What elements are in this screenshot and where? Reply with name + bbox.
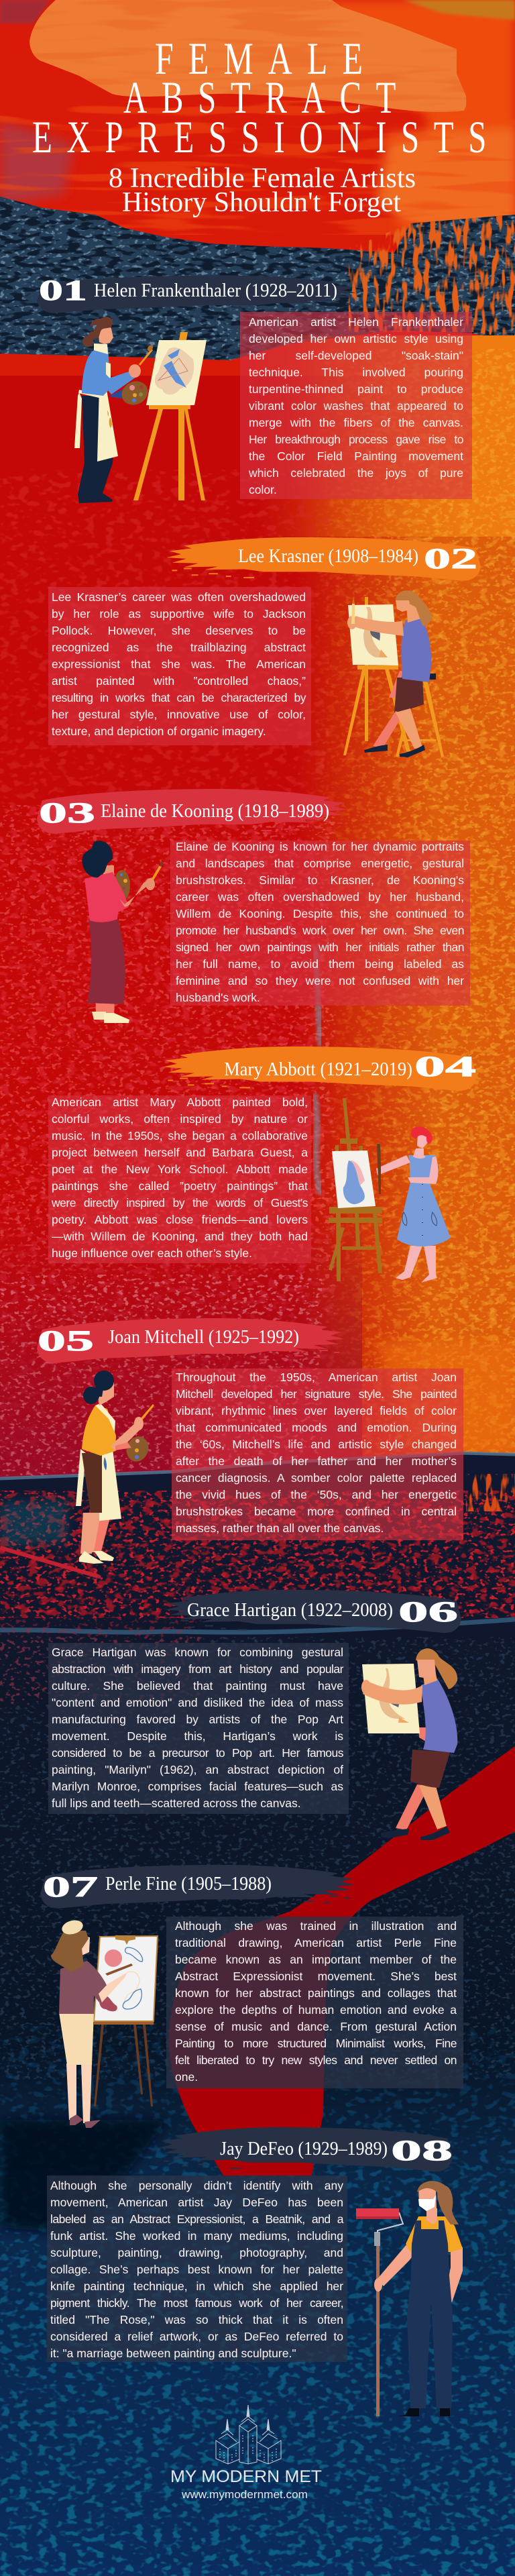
name: Joan Mitchell (1925–1992)	[108, 1326, 299, 1348]
body text: cancer diagnosis. A somber color palette replaced	[176, 1470, 457, 1484]
body text: turpentine-thinned paint to produce	[249, 382, 463, 396]
body text: recognized as the trailblazing abstract	[52, 640, 306, 653]
body text: explore the depths of human emotion and evoke a	[175, 2003, 457, 2017]
body text: that communicated moods and emotion. During	[176, 1421, 457, 1434]
text panel	[170, 841, 470, 1006]
body text: known for her abstract paintings and collages that	[175, 1986, 457, 1999]
body text: —with Willem de Kooning, and they both had	[52, 1229, 308, 1242]
body text: resulting in works that can be characterized by	[52, 691, 306, 704]
footer: My Modern Met logo	[168, 2404, 323, 2502]
heading: 06 Grace Hartigan	[165, 1590, 461, 1633]
illustration: painter with beret at tall easel	[50, 1920, 160, 2129]
body text	[249, 315, 463, 496]
body text	[52, 590, 306, 738]
website: www.mymodernmet.com	[181, 2488, 308, 2501]
number 07: 07	[43, 1872, 98, 1903]
icon: three skyscrapers logo	[215, 2404, 282, 2465]
body text: Pollock. However, she deserves to be	[52, 624, 306, 637]
body text: considered to be a precursor to Pop art. Her famous	[52, 1746, 343, 1759]
body text: Although she was trained in illustration and	[175, 1919, 457, 1932]
body text: Although she personally didn’t identify with any	[50, 2179, 343, 2192]
body text: Abstract Expressionist movement. She’s best	[175, 1970, 457, 1983]
body text: poetry. Abbott was close friends—and lovers	[52, 1213, 308, 1226]
name: Helen Frankenthaler (1928–2011)	[94, 280, 337, 301]
text panel	[48, 1095, 311, 1263]
number 08: 08	[391, 2135, 453, 2167]
body text	[52, 1095, 308, 1260]
body text: signed her own paintings with her initials rather than	[176, 941, 464, 954]
panel: 07 Perle Fine	[40, 1865, 463, 2128]
panel: 05 Joan Mitchell	[37, 1318, 463, 1564]
body text: it: "a marriage between painting and sculpture."	[50, 2347, 296, 2360]
body text: husband's work.	[176, 991, 260, 1004]
body text: poet at the New York School. Abbott made	[52, 1162, 308, 1175]
body text: American artist Helen Frankenthaler	[249, 315, 463, 329]
body text: painting, "Marilyn" (1962), an abstract depiction of	[52, 1763, 343, 1776]
body text: collage. She’s perhaps best known for her palette	[50, 2262, 343, 2275]
body text: were directly inspired by the words of Guest's	[52, 1195, 308, 1209]
text panel	[172, 1368, 463, 1540]
body text: her gestural style, innovative use of color,	[52, 707, 306, 720]
body text: vibrant, rhythmic lines over layered fields of color	[176, 1403, 457, 1417]
body text: labeled as an Abstract Expressionist, a Beatnik, and a	[50, 2212, 343, 2226]
body text: movement, American artist Jay DeFeo has been	[50, 2195, 343, 2208]
body text: masses, rather than all over the canvas.	[176, 1521, 384, 1535]
body text	[176, 1370, 457, 1535]
panel: 03 Elaine de Kooning	[37, 789, 470, 1023]
heading: 05 Joan Mitchell	[37, 1318, 345, 1363]
body text: artist painted with ”controlled chaos,”	[52, 674, 306, 687]
name: Lee Krasner (1908–1984)	[238, 545, 418, 567]
title: Abstract: ABSTRACT	[123, 72, 410, 123]
number 04: 04	[414, 1051, 476, 1083]
body text: sculpture, painting, drawing, photography, and	[50, 2246, 343, 2259]
panel: 08 Jay DeFeo	[0, 2123, 515, 2418]
body text: her self-developed "soak-stain"	[249, 349, 463, 362]
body text: her full name, to avoid them being labeled as	[176, 957, 464, 971]
body text: felt liberated to try new styles and never settled on	[175, 2053, 457, 2066]
panel: 06 Grace Hartigan	[48, 1590, 461, 1840]
subtitle line 2: History Shouldn't Forget	[122, 187, 401, 218]
body text: music. In the 1950s, she began a collaborative	[52, 1128, 308, 1142]
body text: funk artist. She worked in many mediums, including	[50, 2229, 343, 2242]
body text: texture, and depiction of organic imagery.	[52, 724, 266, 738]
text panel	[240, 312, 472, 499]
body text: paintings she called ”poetry paintings” that	[52, 1179, 308, 1193]
heading: 03 Elaine de Kooning	[37, 789, 347, 834]
body text: pigment thickly. The most famous work of her career,	[50, 2296, 343, 2309]
name: Grace Hartigan (1922–2008)	[187, 1599, 393, 1621]
body text: one.	[175, 2070, 198, 2084]
body text: American artist Mary Abbott painted bold,	[52, 1095, 308, 1108]
body text: knife painting technique, in which she applied her	[50, 2279, 343, 2293]
body text: manufacturing favored by artists of the Pop Art	[52, 1712, 343, 1725]
body text: Elaine de Kooning is known for her dynamic portraits	[176, 840, 464, 853]
illustration: painter in yellow with apron and palette	[76, 1371, 154, 1564]
body text: developed her own artistic style using	[249, 331, 463, 345]
name: Mary Abbott (1921–2019)	[224, 1059, 412, 1080]
body text: "content and emotion" and disliked the idea of mass	[52, 1696, 343, 1709]
title block	[32, 33, 501, 218]
brand name and website	[168, 2467, 323, 2502]
body text: considered a relief artwork, or as DeFeo referred to	[50, 2329, 343, 2343]
body text: the vivid hues of the ‘50s, and her energetic	[176, 1488, 457, 1501]
brand name: MY MODERN MET	[170, 2467, 322, 2486]
body text: after the death of her father and her mother’s	[176, 1454, 457, 1468]
body text: Throughout the 1950s, American artist Joan	[176, 1370, 457, 1383]
body text	[50, 2178, 343, 2361]
text panel	[166, 1917, 463, 2088]
body text: became known as an important member of the	[175, 1952, 457, 1966]
body text: titled "The Rose," was so thick that it is often	[50, 2313, 343, 2326]
illustration: painter at easel with palette	[74, 317, 207, 503]
body text	[176, 840, 464, 1004]
name: Elaine de Kooning (1918–1989)	[101, 800, 329, 822]
body text: which celebrated the joys of pure	[249, 466, 463, 479]
subtitle line 1: 8 Incredible Female Artists	[109, 163, 416, 194]
body text: culture. She believed that painting must have	[52, 1678, 343, 1692]
heading: 07 Perle Fine	[40, 1863, 357, 1909]
body text: movement. Despite this, Hartigan’s work is	[52, 1729, 343, 1743]
body text: Willem de Kooning. Despite this, she continued to	[176, 907, 464, 920]
body text: Her breakthrough process gave rise to	[249, 432, 463, 445]
body text: vibrant color washes that appeared to	[249, 398, 463, 412]
illustration: painter with mask and paint roller	[355, 2180, 463, 2419]
text panel	[48, 1643, 349, 1814]
body text: sense of music and dance. From gestural Action	[175, 2019, 457, 2033]
body text: Lee Krasner’s career was often overshadowed	[52, 590, 306, 604]
body text: huge influence over each other’s style.	[52, 1246, 252, 1260]
number 01: 01	[39, 275, 87, 307]
body text: the ‘60s, Mitchell’s life and artistic style changed	[176, 1437, 457, 1450]
body text	[175, 1917, 457, 2085]
body text: promote her husband’s work over her own. She even	[176, 924, 464, 937]
body text: brushstrokes. Similar to Krasner, de Kooning's	[176, 873, 464, 887]
body text	[52, 1645, 343, 1810]
body text: Mitchell developed her signature style. She painted	[176, 1387, 457, 1401]
illustration: painter holding canvas on stool	[343, 590, 444, 757]
body text: technique. This involved pouring	[249, 365, 463, 378]
panel: 01 Helen Frankenthaler	[37, 275, 472, 503]
body text: career was often overshadowed by her husband,	[176, 890, 464, 904]
number 02: 02	[424, 543, 477, 575]
panel: 02 Lee Krasner	[48, 537, 481, 757]
title: Female: FEMALE	[155, 33, 378, 84]
heading: 02 Lee Krasner	[166, 537, 481, 581]
body text: brushstrokes became more confined in central	[176, 1504, 457, 1517]
body text: color.	[249, 483, 277, 496]
name: Jay DeFeo (1929–1989)	[220, 2138, 388, 2159]
number 05: 05	[38, 1326, 94, 1357]
text panel	[47, 2176, 347, 2362]
illustration: painter seen from behind with palette	[82, 841, 164, 1023]
body text: abstraction with imagery from art history and popular	[52, 1662, 343, 1676]
body text: merge with the fibers of the canvas.	[249, 416, 463, 429]
illustration: painter carrying a canvas	[361, 1648, 457, 1840]
body text: Painting to more structured Minimalist works, Fine	[175, 2037, 457, 2050]
number 06: 06	[398, 1597, 458, 1628]
body text: expressionist that she was. The American	[52, 657, 306, 671]
heading: 08 Jay DeFeo	[158, 2125, 453, 2172]
illustration: painter in blue dress at wooden easel	[329, 1098, 451, 1283]
body text: and landscapes that comprise energetic, gestural	[176, 857, 464, 870]
text panel	[48, 587, 311, 745]
heading: 04 Mary Abbott	[163, 1046, 477, 1091]
body text: by her role as supportive wife to Jackson	[52, 606, 306, 620]
body text: feminine and so they were not confused with her	[176, 974, 464, 987]
body text: traditional drawing, American artist Perle Fine	[175, 1936, 457, 1949]
body text: Grace Hartigan was known for combining gestural	[52, 1645, 343, 1658]
body text: the Color Field Painting movement	[249, 449, 463, 463]
body text: Marilyn Monroe, comprises facial features—such as	[52, 1779, 343, 1792]
body text: colorful works, often inspired by nature or	[52, 1112, 308, 1126]
heading: 01 Helen Frankenthaler	[37, 275, 356, 313]
body text: full lips and teeth—scattered across the canvas.	[52, 1796, 301, 1810]
name: Perle Fine (1905–1988)	[105, 1873, 272, 1894]
panel: 04 Mary Abbott	[48, 1046, 477, 1283]
number 03: 03	[39, 798, 95, 829]
body text: project between herself and Barbara Guest, a	[52, 1146, 308, 1159]
